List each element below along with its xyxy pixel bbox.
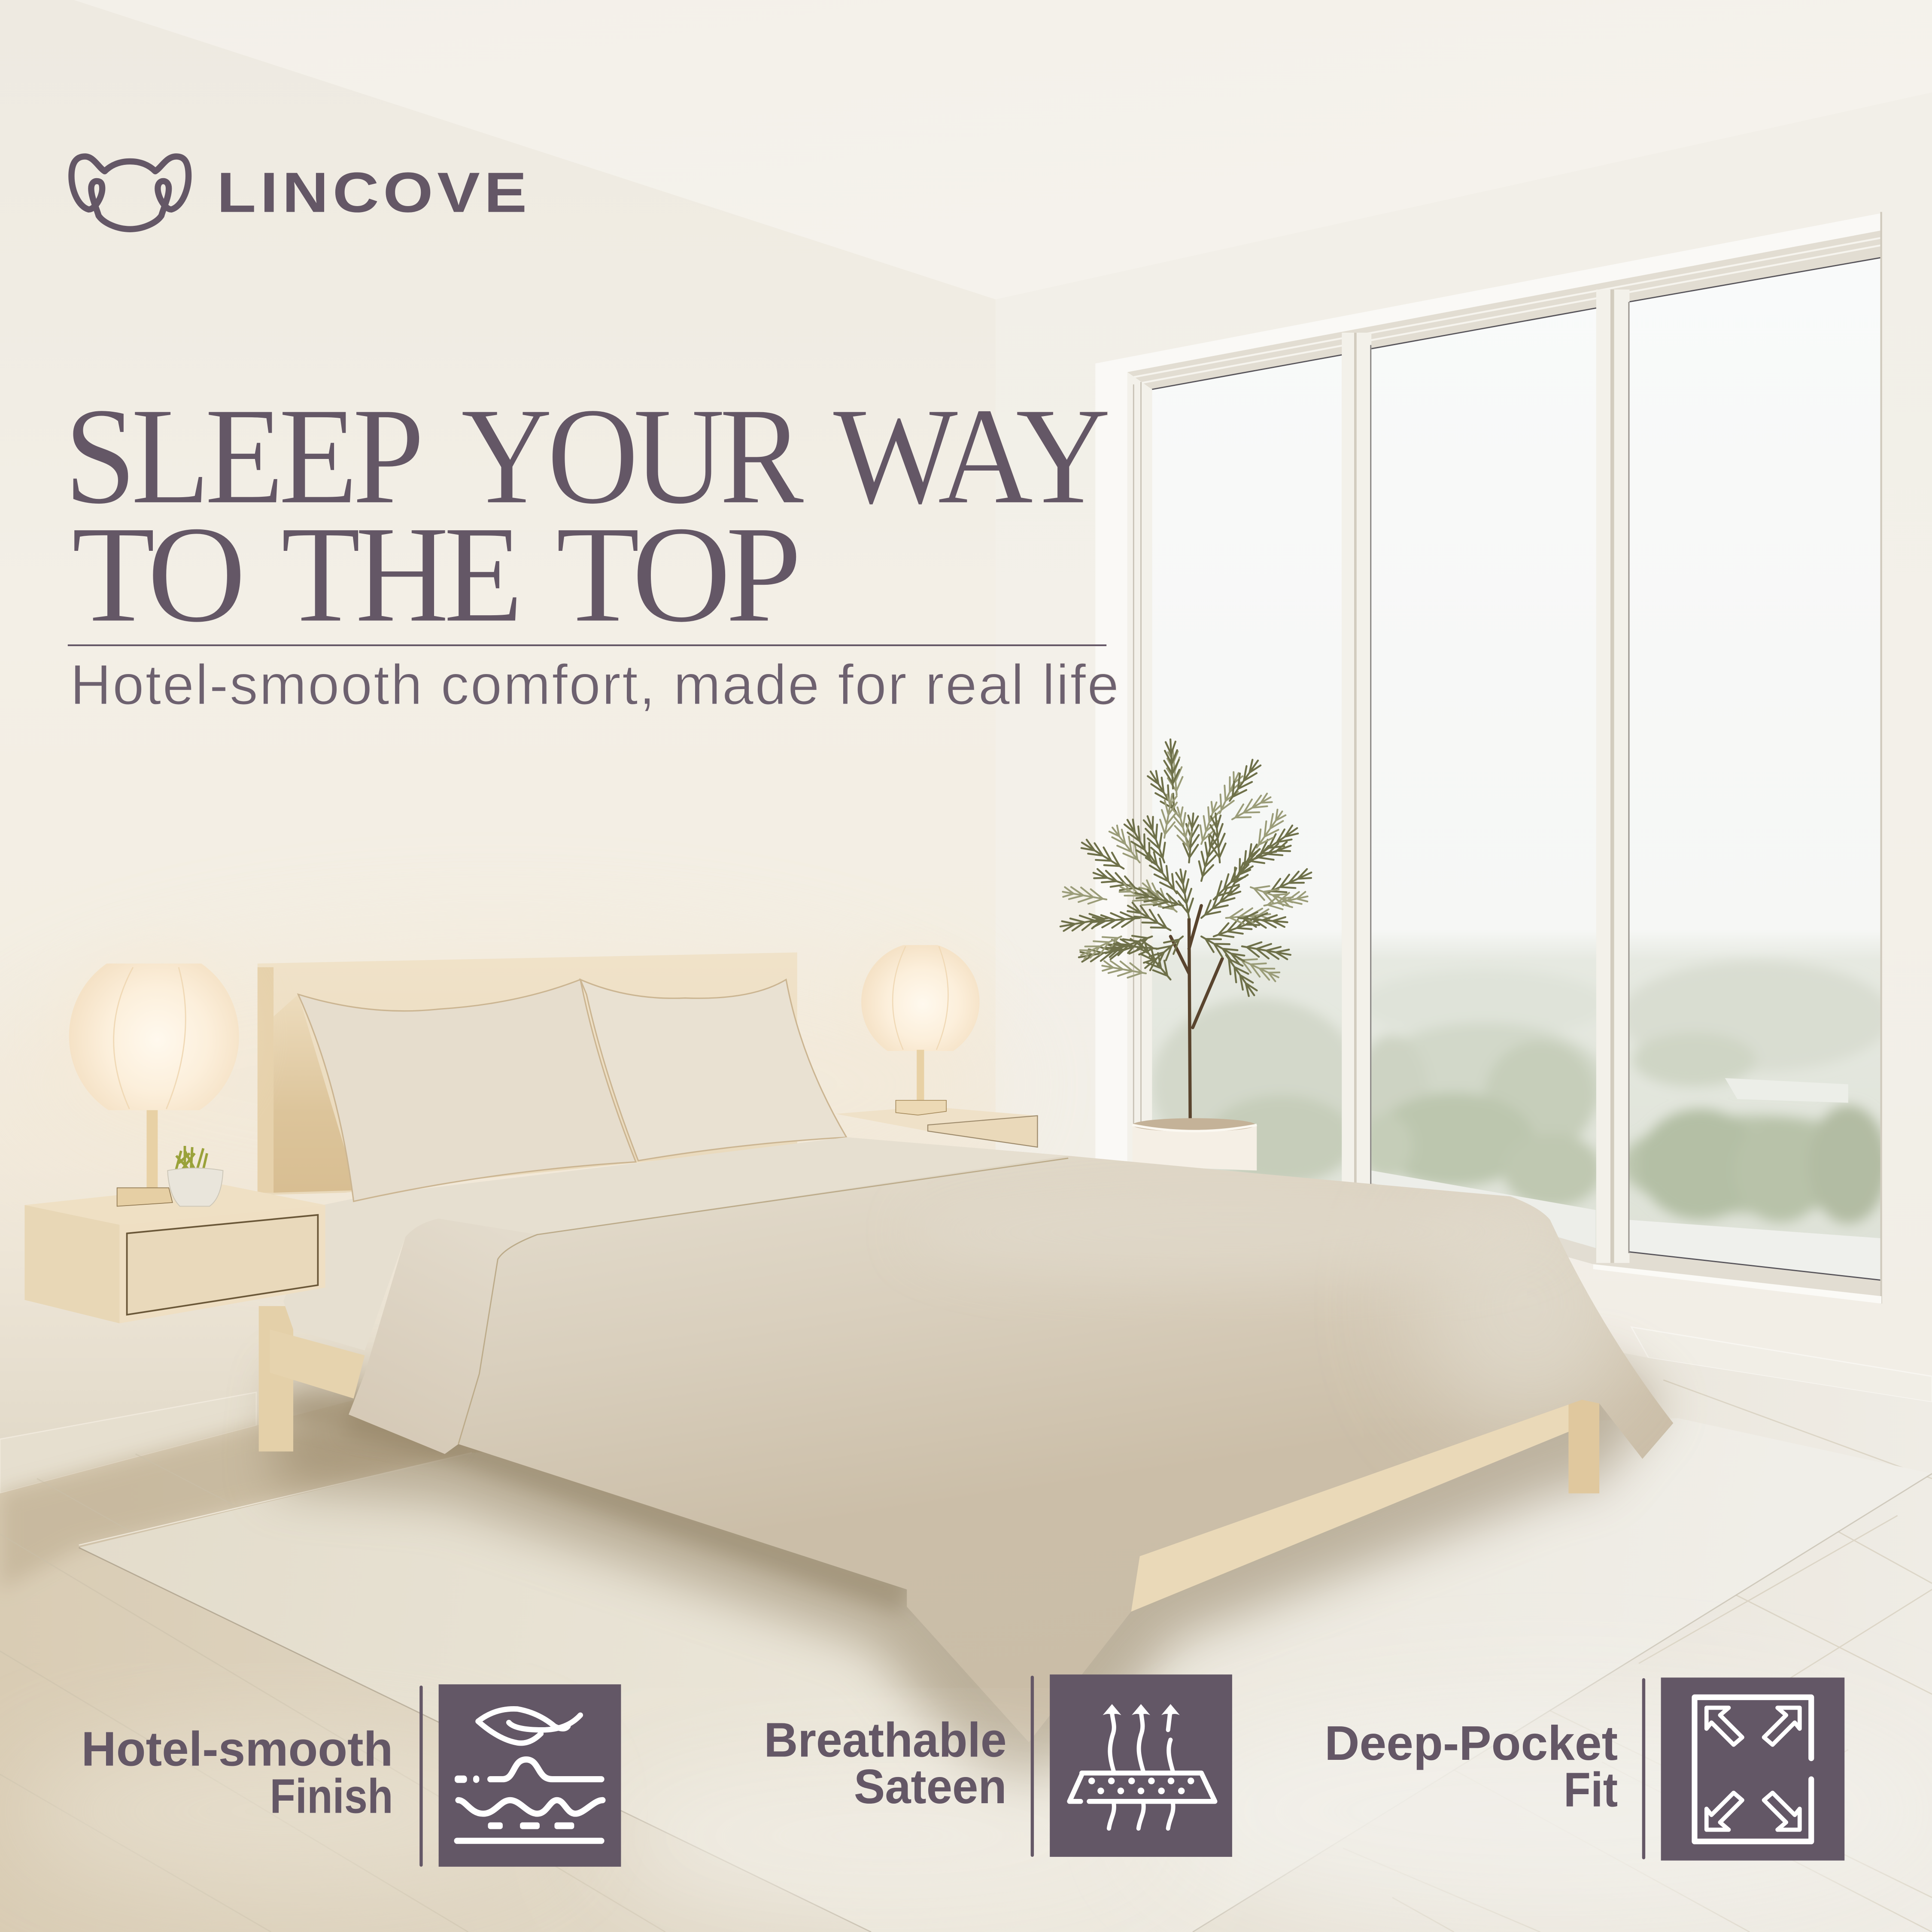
- right leg: [1568, 1400, 1599, 1493]
- small succulent: [167, 1146, 223, 1206]
- brand name: LINCOVE: [217, 161, 531, 224]
- feature label: [81, 1722, 393, 1823]
- title line one: YOUR: [461, 379, 805, 533]
- planter: [1132, 1120, 1257, 1170]
- right nightstand: [835, 1106, 1037, 1147]
- left wall: [0, 0, 996, 1493]
- soft light patches behind feature labels: [12, 1700, 1932, 1922]
- lamp base: [896, 1100, 946, 1115]
- feature label: Sateen: [854, 1759, 1007, 1814]
- feature: hotel-smooth finish: [81, 1684, 621, 1867]
- left pillow: [298, 980, 636, 1201]
- feature label: Fit: [1564, 1762, 1618, 1817]
- bed frame: [259, 1306, 1599, 1612]
- bed shadow on rug: [277, 1398, 1626, 1738]
- logo: [71, 156, 531, 229]
- rug: [79, 1418, 1932, 1932]
- left baseboard: [0, 1392, 256, 1493]
- title line two: TOP: [556, 497, 799, 651]
- potted olive tree: [1059, 739, 1315, 1170]
- ceiling: [0, 0, 1932, 299]
- duvet right light side: [912, 1183, 1639, 1429]
- pillow shadow on headboard: [273, 994, 357, 1193]
- title line two: [71, 497, 799, 651]
- title line two: TO: [71, 497, 242, 651]
- title line one: WAY: [833, 379, 1109, 533]
- right pillow: [580, 980, 847, 1160]
- divider: [419, 1686, 423, 1867]
- icon: bear face logo mark: [71, 156, 188, 229]
- nightstand top: [24, 1184, 325, 1225]
- feature label: Hotel-smooth: [81, 1722, 393, 1777]
- left rail: [270, 1330, 365, 1398]
- tree trunk: [1170, 905, 1222, 1130]
- right lamp: [849, 929, 992, 1115]
- duvet fold panel: [349, 1218, 537, 1454]
- lamp glow: [55, 938, 252, 1135]
- feature label: [1324, 1716, 1618, 1817]
- feature label: Finish: [270, 1769, 393, 1823]
- lamp shade: [69, 949, 239, 1124]
- floor: [0, 1232, 1932, 1932]
- divider: [1642, 1678, 1645, 1859]
- feature label: Breathable: [764, 1713, 1007, 1768]
- right side rail: [1131, 1400, 1582, 1612]
- window frame: [1127, 231, 1881, 1303]
- headboard: [258, 952, 797, 1195]
- window: [1095, 212, 1891, 1306]
- nightstand side: [24, 1205, 119, 1323]
- feature label: Deep-Pocket: [1324, 1716, 1618, 1771]
- title line one: [64, 379, 1109, 533]
- lamp stem: [917, 1050, 924, 1102]
- left lamp: [55, 938, 252, 1206]
- icon: airflow through fabric: [1050, 1674, 1232, 1857]
- folded sheet band: [439, 1137, 1068, 1235]
- window reveal: [1095, 213, 1881, 1170]
- wall lamp glow: [0, 924, 1010, 1245]
- title line two: THE: [281, 497, 517, 651]
- window mullions: [1342, 212, 1882, 1303]
- divider: [1031, 1676, 1034, 1857]
- floor planks: [0, 1380, 1932, 1932]
- feature: breathable sateen: [764, 1674, 1232, 1857]
- nightstand front: [119, 1205, 325, 1323]
- left leg: [259, 1306, 293, 1452]
- lamp glow: [849, 929, 992, 1072]
- duvet body: [349, 1137, 1673, 1742]
- duvet fold lines: [459, 1158, 1068, 1444]
- drawer: [127, 1215, 318, 1315]
- headline: [64, 379, 1109, 651]
- dark floor behind the rug: [0, 1425, 472, 1589]
- lamp base: [117, 1188, 173, 1206]
- icon: stretch corners: [1661, 1677, 1844, 1861]
- lamp stem: [147, 1110, 158, 1188]
- duvet: [349, 1137, 1673, 1742]
- glass and view: [1146, 246, 1891, 1306]
- subtitle: Hotel-smooth comfort, made for real life: [70, 653, 1119, 716]
- tree foliage: [1059, 739, 1315, 999]
- window sill: [1593, 1264, 1881, 1303]
- left floating nightstand: [24, 1184, 325, 1323]
- title line one: SLEEP: [64, 379, 422, 533]
- feature label: [764, 1713, 1007, 1814]
- right wall: [996, 92, 1932, 1429]
- headline rule: [68, 644, 1106, 646]
- pane top edges: [1152, 258, 1881, 1280]
- feature: deep-pocket fit: [1324, 1677, 1844, 1861]
- icon: leaf over smooth waves: [439, 1684, 621, 1867]
- bottom sheet: [283, 1163, 636, 1350]
- right baseboard: [1631, 1327, 1932, 1402]
- lamp shade: [861, 942, 980, 1061]
